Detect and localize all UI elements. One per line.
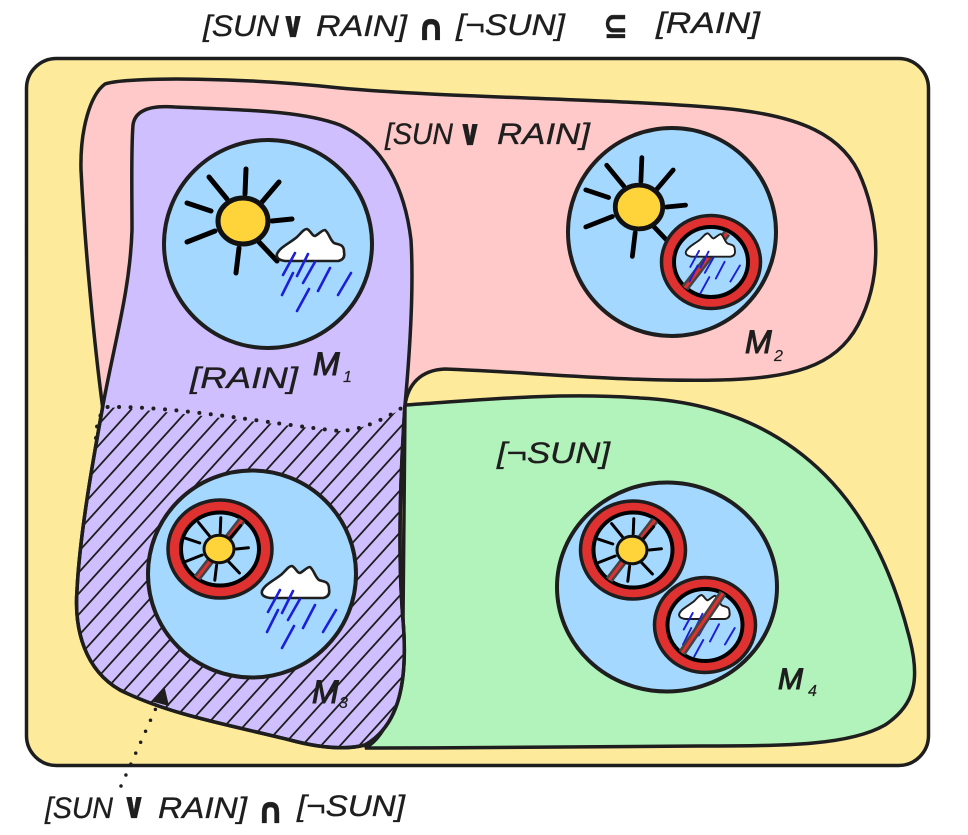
icon: cloud and rain M1 (277, 229, 351, 311)
world M1 (164, 140, 372, 348)
title formula: [¬SUN] (455, 9, 566, 42)
arrow: dotted pointer to hatched area (121, 688, 168, 786)
label: M4: 4 (808, 683, 817, 700)
label: M3: 3 (339, 695, 348, 712)
bottom formula (44, 786, 406, 832)
icon: crossed out sun M3 (168, 500, 272, 598)
bottom formula: [¬SUN] (296, 790, 406, 823)
label: sun or rain: [SUN (384, 118, 453, 151)
dotted boundary line (96, 405, 406, 438)
label: sun or rain: RAIN] (497, 118, 591, 151)
label: M4 (778, 663, 817, 700)
panel: universe background (26, 58, 928, 766)
label: rain: [RAIN] (189, 362, 299, 395)
region: sun or rain (81, 79, 876, 410)
world M3 (148, 470, 356, 678)
icon: crossed out rain M4 (654, 578, 756, 672)
label: sun or rain: ∨ (458, 113, 482, 154)
world M4 (557, 482, 777, 692)
label: M2: 2 (773, 348, 783, 365)
bottom formula: ∨ (122, 786, 146, 827)
label: M2: M (745, 324, 772, 360)
icon: sun M1 (187, 169, 292, 273)
title formula: ∨ (281, 5, 305, 46)
label: M1: M (313, 346, 340, 382)
icon: crossed out rain M2 (662, 216, 760, 308)
label: M1: 1 (343, 369, 352, 386)
icon: sun M2 (586, 158, 686, 256)
re-stroked region outline (77, 405, 405, 748)
title formula: ∩ (417, 8, 445, 49)
title formula (202, 5, 761, 49)
bottom formula: RAIN] (158, 792, 248, 825)
title formula: ⊆ (603, 6, 628, 47)
icon: crossed out sun M4 (580, 501, 686, 599)
region: rain (77, 107, 412, 748)
title formula: [SUN (202, 10, 279, 43)
label: M1 (313, 346, 352, 386)
label: M4: M (778, 663, 803, 696)
region: not sun (365, 396, 915, 748)
world M2 (568, 128, 776, 336)
label: not sun: [¬SUN] (496, 437, 611, 470)
hatched intersection area (78, 408, 402, 746)
label: M2 (745, 324, 783, 365)
bottom formula: ∩ (257, 791, 284, 832)
title formula: RAIN] (316, 10, 408, 43)
title formula: [RAIN] (655, 7, 761, 40)
label: sun or rain (384, 113, 591, 154)
icon: cloud and rain M3 (262, 566, 336, 648)
label: M3: M (312, 674, 339, 710)
bottom formula: [SUN (44, 792, 113, 825)
